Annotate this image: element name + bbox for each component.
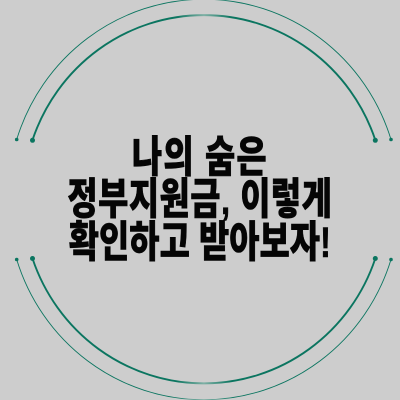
title: 확인하고 받아보자! [69,218,331,266]
outer top arc [15,0,393,141]
inner top arc [30,15,378,143]
title: 정부지원금, 이렇게 [67,176,332,224]
outer bottom arc [15,258,393,400]
inner bottom arc [30,256,378,383]
title: 나의 숨은 [132,134,268,182]
title [67,134,332,266]
